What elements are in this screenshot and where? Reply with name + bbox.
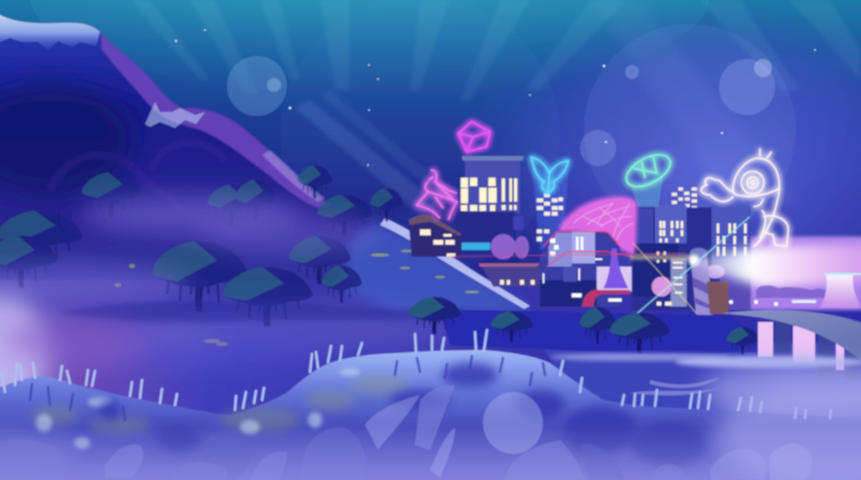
large faint lens ring and diagonal light streaks	[280, 0, 800, 275]
lower left fog	[0, 425, 80, 480]
slope pale edge	[380, 218, 530, 309]
lens flares in the sky	[227, 24, 796, 236]
central building	[540, 231, 633, 307]
foreground hill	[0, 330, 861, 480]
left house	[408, 214, 462, 257]
right building	[632, 205, 750, 310]
mountain ridge purple rim	[100, 32, 332, 208]
sky light rays	[130, 0, 861, 100]
dark path across the hill	[60, 301, 470, 322]
lens flare on the foreground	[483, 392, 543, 454]
terrace beside lighthouse	[707, 282, 728, 314]
cooling tower	[820, 273, 861, 308]
mid tower under butterfly	[532, 168, 568, 250]
purple haze behind the shore	[750, 237, 861, 310]
trees on the hillside	[0, 165, 404, 326]
water highlights	[550, 353, 861, 395]
inner mountain folds	[50, 142, 240, 235]
neon willow tree crown	[560, 199, 635, 253]
midground land	[0, 280, 861, 425]
pink shrubs	[491, 234, 725, 297]
shore lights	[729, 300, 816, 306]
grass blades	[2, 330, 831, 418]
lighthouse	[690, 248, 713, 317]
mountain ridge pale highlight	[262, 150, 325, 202]
back tower	[457, 156, 524, 242]
red car	[582, 290, 630, 307]
low wing with lit windows	[478, 263, 540, 287]
violet glow on the right of the sky	[460, 5, 861, 335]
red neon roof lines	[543, 232, 633, 267]
cyan glow strip	[459, 243, 490, 250]
foreshore trees	[409, 297, 759, 355]
beam below neon diamond	[632, 175, 663, 207]
willow trunk	[603, 248, 628, 288]
mountain	[0, 11, 530, 350]
teal aurora glow	[30, 0, 710, 96]
tower windows	[461, 178, 517, 211]
yellow tufts	[115, 250, 479, 346]
rocks	[0, 385, 812, 480]
olive moss patches	[31, 375, 410, 434]
dark grass in the hill	[30, 356, 545, 420]
bottom fog	[0, 420, 861, 480]
mountain shadow	[0, 85, 135, 195]
shoreline of the far island	[440, 310, 770, 354]
bridge	[722, 310, 861, 379]
neon cube	[458, 122, 490, 152]
dark blue hill shadows	[100, 363, 708, 467]
neon diamond	[621, 148, 675, 193]
pale spots	[36, 368, 360, 449]
central building windows	[543, 237, 622, 302]
lit pink bridge lights	[758, 322, 844, 370]
right shore fog	[700, 360, 861, 420]
neon butterfly	[531, 157, 568, 192]
stars	[175, 29, 816, 166]
left low fog	[0, 295, 320, 405]
neon mascot	[701, 148, 788, 247]
neon city	[408, 122, 861, 317]
willow crown strands	[573, 203, 633, 240]
right building windows	[657, 221, 747, 306]
mid hill fog	[0, 195, 470, 370]
snow cap	[0, 11, 100, 50]
bright light beam to the right	[695, 244, 861, 288]
bridge pillars	[775, 320, 859, 379]
bridge deck	[722, 310, 861, 368]
distant tree silhouettes	[756, 285, 828, 298]
horizontal lens glare	[450, 217, 750, 317]
right tower upper window grid	[672, 187, 697, 218]
water	[540, 343, 861, 425]
lower right fog	[715, 380, 861, 480]
neon spider figure	[417, 170, 457, 220]
hillside slope	[115, 218, 530, 346]
snow patch on ridge	[145, 102, 205, 128]
